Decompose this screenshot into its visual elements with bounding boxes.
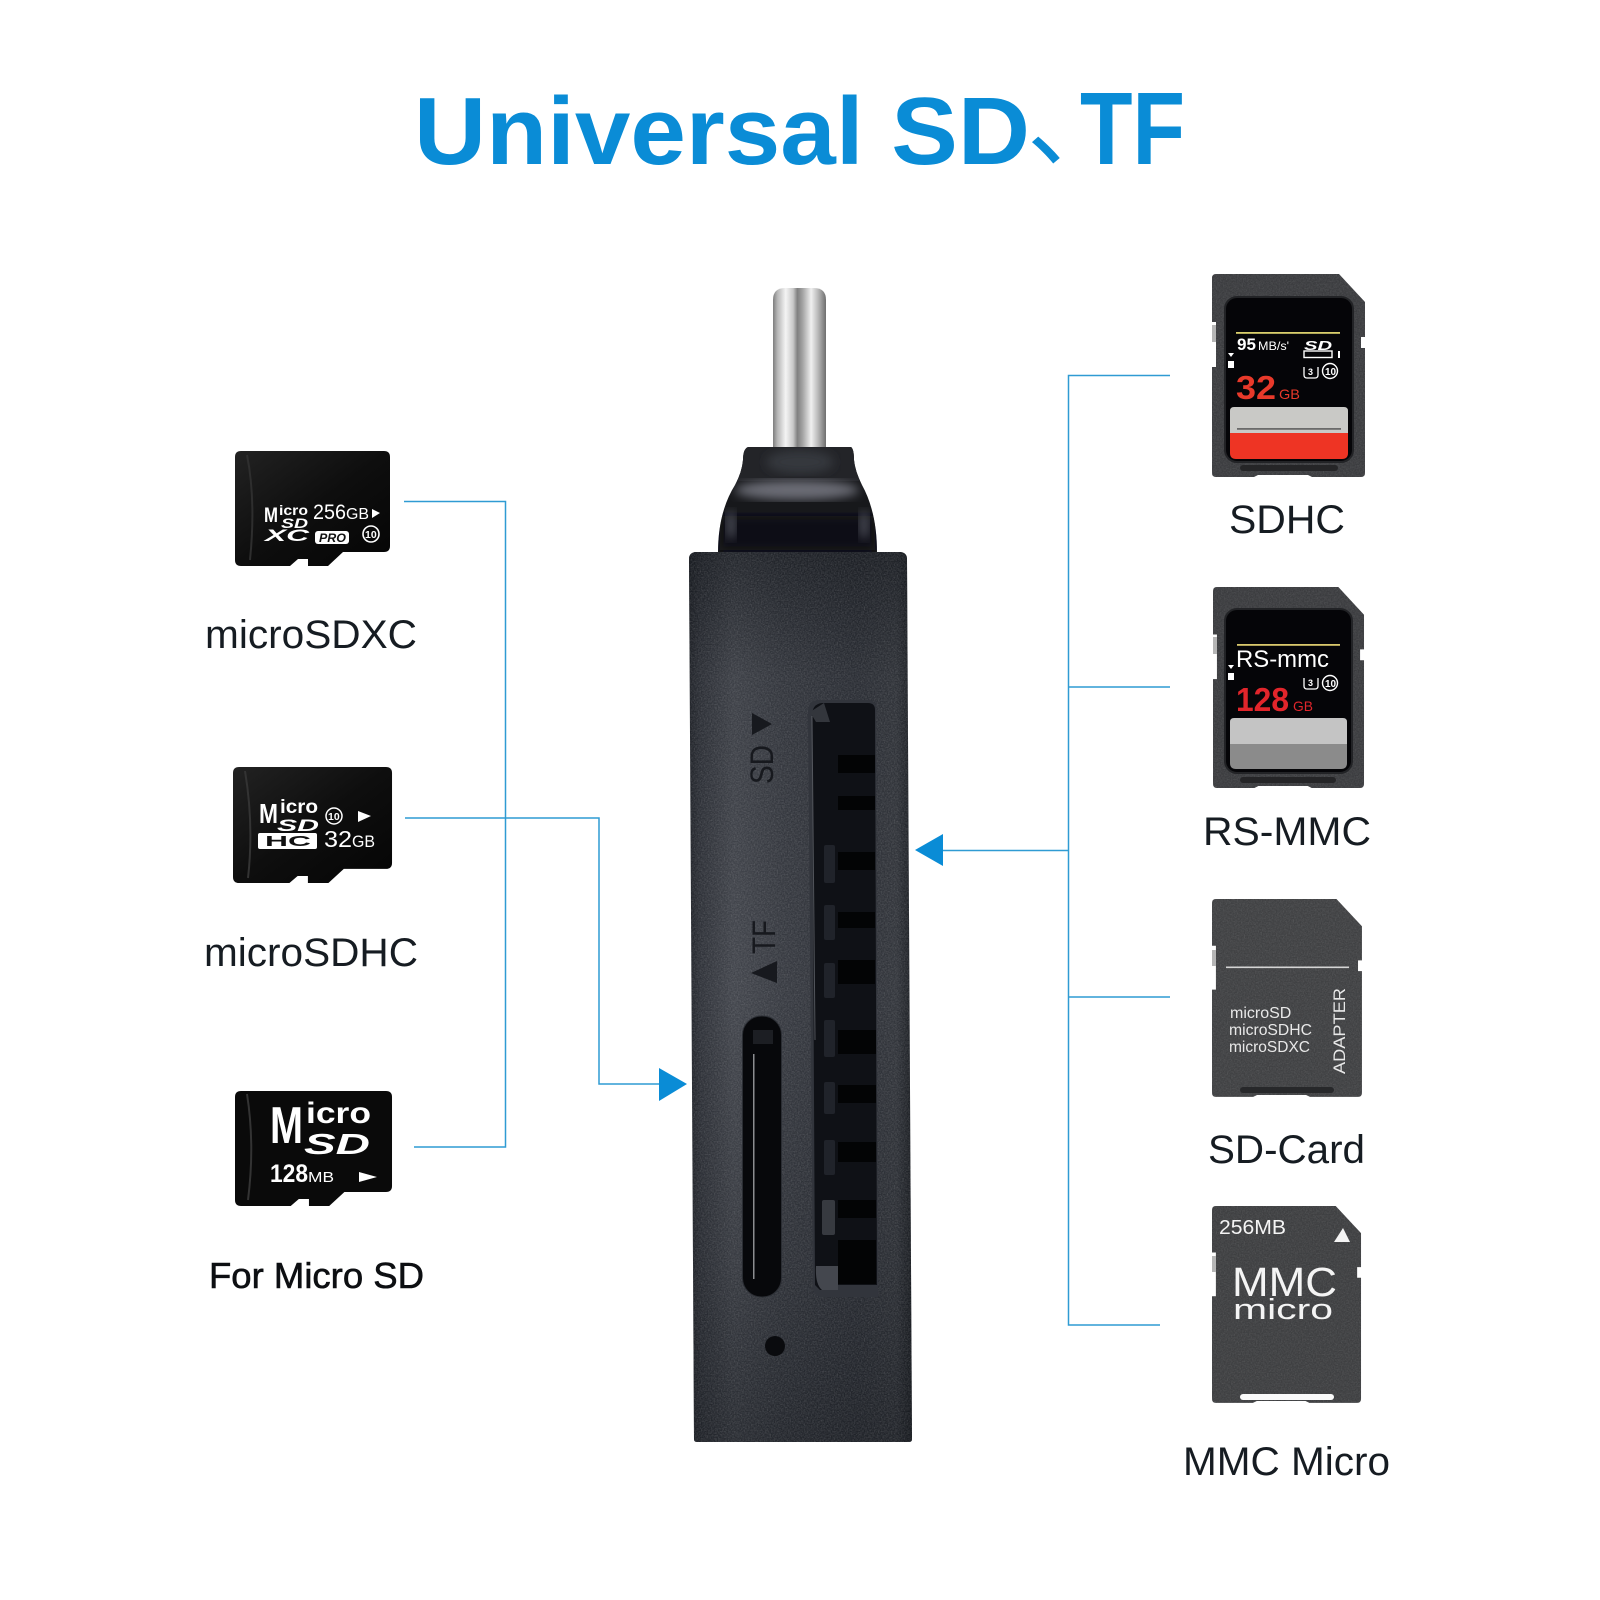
SD slot [808, 700, 878, 1297]
arrow: right into SD slot [915, 834, 943, 866]
adapter text: microSDHC [1229, 1022, 1312, 1039]
card logo and capacity [258, 797, 375, 852]
card logo and capacity: M [264, 504, 278, 527]
TF slot [742, 1016, 782, 1297]
title [414, 47, 1185, 186]
card text [1219, 1217, 1350, 1326]
card logo and capacity: icro [279, 502, 308, 518]
connector lines: right cards [942, 376, 1170, 1325]
card body [1212, 899, 1362, 1097]
body [689, 552, 912, 1442]
microSDXC card [235, 451, 390, 566]
microSDHC card [233, 767, 392, 883]
card logo and capacity: 32 [324, 826, 352, 852]
card logo and capacity: 10 [365, 529, 377, 541]
title: TF [1080, 71, 1185, 186]
card body [1212, 1206, 1361, 1403]
card logo and capacity: icro [280, 797, 318, 818]
SDHC card: GB [1279, 386, 1300, 402]
TF marking [746, 920, 782, 983]
adapter text: microSD [1230, 1005, 1291, 1022]
Micro SD card [235, 1091, 392, 1206]
card label art [1236, 332, 1340, 334]
card logo and capacity: M [270, 1097, 303, 1155]
card logo and capacity: SD [277, 816, 319, 835]
MMC micro card [1212, 1206, 1361, 1403]
title: 、 [1027, 47, 1123, 186]
indicator hole [765, 1336, 785, 1356]
RS-MMC card: 3 [1308, 678, 1313, 688]
card logo and capacity: MB [308, 1169, 334, 1186]
label: microSDXC: microSDXC [205, 613, 417, 657]
card logo and capacity: XC [263, 526, 310, 545]
adapter text: ADAPTER [1330, 988, 1349, 1074]
TF marking: TF [746, 920, 782, 954]
card body [235, 451, 390, 566]
card body [233, 767, 392, 883]
label: For Micro SD: For Micro SD [209, 1255, 424, 1296]
SD marking [744, 713, 780, 784]
card logo and capacity [270, 1097, 377, 1188]
card text: 256MB [1219, 1217, 1286, 1239]
RS-MMC card [1213, 587, 1364, 788]
adapter text: microSDXC [1229, 1039, 1310, 1056]
label: microSDHC: microSDHC [204, 931, 418, 975]
card logo and capacity: 128 [270, 1160, 308, 1188]
label: MMC Micro: MMC Micro [1183, 1440, 1390, 1484]
label: SD-Card: SD-Card [1208, 1128, 1365, 1172]
RS-MMC card: 128 [1236, 681, 1289, 718]
card body [1213, 587, 1364, 788]
title: Universal SD [414, 78, 1030, 185]
connector lines: left cards [404, 502, 660, 1147]
adapter text [1229, 988, 1349, 1074]
card logo and capacity: icro [306, 1097, 371, 1130]
card logo and capacity: GB [346, 506, 369, 523]
RS-MMC card: 10 [1325, 679, 1337, 690]
card logo and capacity: HC [265, 833, 311, 850]
SDHC card: 10 [1325, 367, 1337, 378]
card body [235, 1091, 392, 1206]
card logo and capacity: GB [352, 832, 375, 851]
SDHC card: SD [1304, 338, 1333, 353]
label: RS-MMC: RS-MMC [1203, 810, 1371, 854]
RS-MMC card: RS-mmc [1236, 646, 1329, 673]
card logo and capacity: 256 [313, 501, 346, 524]
metal USB-C pin [773, 288, 826, 447]
SDHC card: 3 [1308, 367, 1313, 377]
SDHC card: 95 [1237, 335, 1256, 354]
SD-Card adapter [1212, 899, 1362, 1097]
SDHC card: MB/s' [1258, 339, 1289, 353]
card logo and capacity: 10 [328, 811, 340, 823]
card logo and capacity: M [259, 798, 278, 829]
SDHC card [1212, 274, 1365, 477]
card logo and capacity: PRO [319, 531, 347, 545]
SDHC card: 32 [1236, 369, 1276, 406]
card logo and capacity: SD [281, 515, 308, 531]
card text: MMC [1232, 1259, 1337, 1305]
card logo and capacity [263, 501, 380, 545]
collar [718, 447, 877, 552]
arrow: left into TF slot [659, 1068, 687, 1101]
card logo and capacity: SD [304, 1129, 370, 1161]
card reader device [689, 288, 912, 1442]
SD marking: SD [744, 745, 780, 784]
label: SDHC: SDHC [1229, 498, 1345, 542]
card label art [1237, 644, 1340, 646]
RS-MMC card: GB [1293, 698, 1313, 714]
card text: micro [1233, 1294, 1333, 1326]
card body [1212, 274, 1365, 477]
